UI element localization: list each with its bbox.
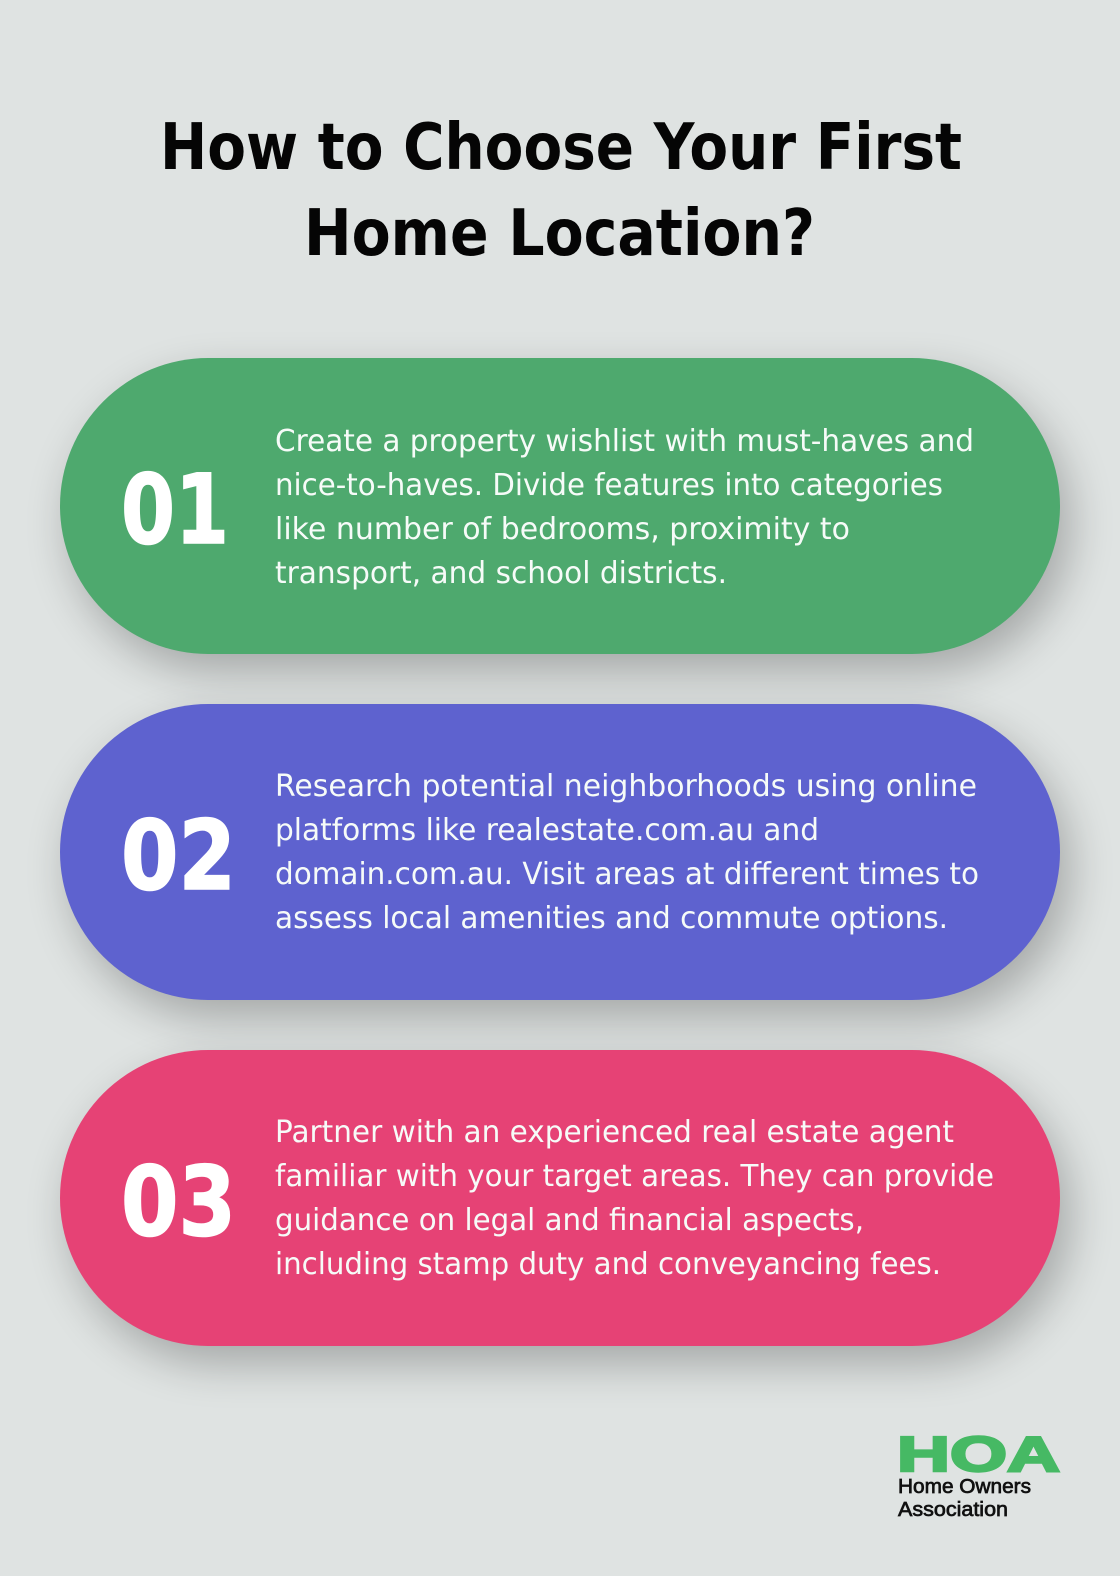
- text block: step 01 description: nice-to-haves. Divide features into categories: [275, 468, 943, 503]
- panel: step 01: [60, 358, 1070, 672]
- title: How to Choose Your First: [160, 111, 962, 185]
- number 01: 01: [121, 454, 229, 566]
- text block: step 03 description: guidance on legal and financial aspects,: [275, 1203, 864, 1238]
- text block: step 02 description: [275, 769, 979, 936]
- text block: step 01 description: transport, and school districts.: [275, 556, 727, 591]
- logo: Home Owners Association: HOA: [897, 1428, 1060, 1482]
- text block: step 02 description: Research potential neighborhoods using online: [275, 769, 977, 804]
- text block: step 01 description: like number of bedrooms, proximity to: [275, 512, 850, 547]
- text block: step 03 description: Partner with an experienced real estate agent: [275, 1115, 954, 1150]
- pill: green background: [60, 358, 1060, 654]
- text block: step 02 description: domain.com.au. Visit areas at different times to: [275, 857, 979, 892]
- text block: step 01 description: [275, 424, 974, 591]
- title: Home Location?: [304, 197, 815, 271]
- panel: step 02: [60, 704, 1070, 1018]
- logo: Home Owners Association: Association: [898, 1499, 1008, 1521]
- title: [160, 111, 962, 271]
- number 03: 03: [121, 1146, 236, 1258]
- logo: Home Owners Association: Home Owners: [898, 1476, 1031, 1498]
- text block: step 03 description: familiar with your target areas. They can provide: [275, 1159, 994, 1194]
- panel: step 03: [60, 1050, 1070, 1364]
- pill: pink background: [60, 1050, 1060, 1346]
- text block: step 01 description: Create a property wishlist with must-haves and: [275, 424, 974, 459]
- text block: step 03 description: including stamp duty and conveyancing fees.: [275, 1247, 941, 1282]
- logo: Home Owners Association: [897, 1428, 1060, 1521]
- pill: blue background: [60, 704, 1060, 1000]
- text block: step 02 description: assess local amenities and commute options.: [275, 901, 948, 936]
- text block: step 02 description: platforms like realestate.com.au and: [275, 813, 819, 848]
- number 02: 02: [121, 800, 236, 912]
- text block: step 03 description: [275, 1115, 994, 1282]
